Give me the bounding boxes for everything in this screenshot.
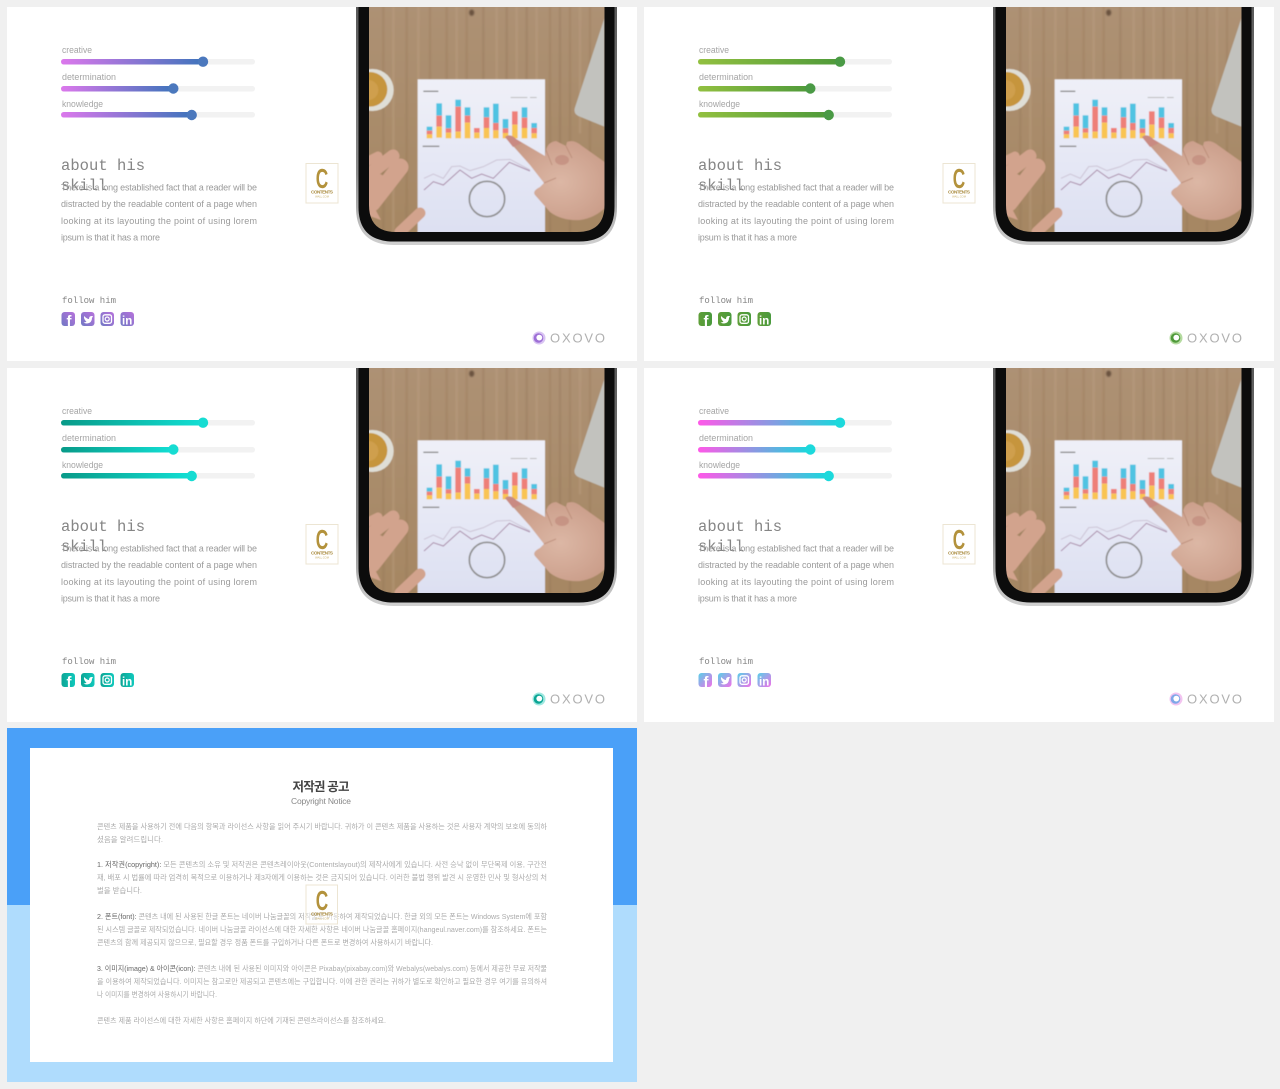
title: copyright notice: 저작권 공고 (292, 779, 350, 794)
social icons: in (759, 316, 769, 328)
phone with photo (989, 363, 1254, 606)
badge: contents: WALL.COM (315, 194, 329, 198)
social icons (698, 312, 771, 330)
body text (61, 182, 257, 242)
section: font: 콘텐츠의 함께 제공되지 않으므로, 필요할 경우 정품 폰트를 구입하거나 다른 폰트로 변경하여 사용하시기 바랍니다. (97, 937, 433, 947)
skill bars (61, 45, 255, 120)
skill bars (698, 406, 892, 481)
badge: contents (306, 163, 338, 203)
body text: There is a long established fact that a reader will be (61, 182, 257, 192)
phone with photo (352, 363, 617, 606)
logo: oxovo: OXOVO (1187, 692, 1242, 706)
section: copyright (97, 859, 547, 895)
badge: contents: C (953, 524, 965, 555)
panel: slide teal (7, 363, 637, 722)
badge: contents: WALL.COM (315, 916, 329, 920)
body text: There is a long established fact that a reader will be (698, 544, 894, 554)
social icons: f (66, 313, 72, 330)
body text: ipsum is that it has a more (698, 594, 797, 604)
body text: There is a long established fact that a reader will be (698, 182, 894, 192)
heading: about his skill: skill (61, 538, 107, 556)
social icons (62, 673, 134, 691)
body text (61, 544, 257, 604)
body text: looking at its layouting the point of using lorem (698, 216, 894, 226)
title: copyright notice (291, 779, 351, 806)
badge: contents (306, 885, 338, 924)
badge: contents: WALL.COM (952, 194, 966, 198)
social icons: in (122, 316, 132, 328)
body text (698, 544, 894, 604)
skill bars: creative (62, 406, 92, 416)
skill bars: knowledge (62, 99, 103, 109)
heading: about his skill: about his (61, 518, 145, 536)
skill bars: creative (699, 45, 729, 55)
badge: contents (943, 524, 975, 564)
body text: ipsum is that it has a more (61, 232, 160, 242)
section: image and icon: 을 이용하여 제작되었습니다. 이미지는 참고로만 제공되고 콘텐츠에는 구입합니다. 이에 관한 권리는 귀하가 별도로 확인하고 필요한 경우 여기를 유의하셔 (97, 976, 547, 986)
badge: contents: WALL.COM (315, 556, 329, 560)
skill bars: knowledge (699, 460, 740, 470)
heading: about his skill (698, 157, 782, 195)
body text: ipsum is that it has a more (61, 594, 160, 604)
body text: distracted by the readable content of a page when (61, 560, 257, 570)
skill bars: determination (699, 72, 753, 82)
panel: copyright notice (7, 728, 637, 1082)
intro text: 셨음을 알려드립니다. (97, 834, 163, 844)
skill bars (698, 45, 892, 120)
heading: about his skill: about his (698, 518, 782, 536)
skill bars: determination (699, 433, 753, 443)
body text (698, 182, 894, 242)
badge: contents: CONTENTS (311, 912, 333, 916)
follow him label: follow him (62, 657, 116, 667)
body text: There is a long established fact that a reader will be (61, 544, 257, 554)
phone with photo (989, 2, 1254, 245)
closing text: 콘텐츠 제품 라이선스에 대한 자세한 사항은 홈페이지 하단에 기재된 콘텐츠라이선스를 참조하세요. (97, 1015, 386, 1025)
phone with photo (352, 2, 617, 245)
section: copyright: 재, 배포 시 법률에 따라 엄격히 목적으로 이용하거나 제3자에게 이용하는 것은 금지되어 있습니다. 이러한 불법 행위 발견 시 운영한 민사 및 형사상의 처 (97, 872, 547, 882)
logo: oxovo: OXOVO (1187, 330, 1242, 346)
section: image and icon (97, 963, 547, 999)
badge: contents: C (316, 163, 328, 194)
heading: about his skill: skill (698, 538, 744, 556)
follow him label: follow him (699, 296, 753, 306)
panel: slide green (644, 2, 1274, 361)
body text: distracted by the readable content of a page when (698, 560, 894, 570)
social icons (62, 312, 134, 330)
badge: contents (943, 163, 975, 203)
badge: contents: WALL.COM (952, 556, 966, 560)
skill bars: determination (62, 433, 116, 443)
social icons: f (704, 674, 710, 691)
section: font: 된 시스템 글꼴로 제작되었습니다. 네이버 나눔글꼴 라이선스에 대한 자세한 사항은 네이버 나눔글꼴 홈페이지(hangeul.naver.com)를 참조하세요. 폰트는 (97, 924, 547, 934)
logo: oxovo: OXOVO (550, 692, 605, 706)
badge: contents (306, 524, 338, 564)
badge: contents: C (316, 524, 328, 555)
badge: contents: CONTENTS (948, 190, 970, 194)
body text: ipsum is that it has a more (698, 232, 797, 242)
social icons: f (704, 313, 710, 330)
skill bars: knowledge (699, 99, 740, 109)
section: copyright: 벌을 받습니다. (97, 885, 142, 895)
skill bars: creative (699, 406, 729, 416)
social icons: f (66, 674, 72, 691)
panel: slide pink (644, 363, 1274, 722)
logo: oxovo: OXOVO (550, 330, 605, 346)
follow him label: follow him (699, 657, 753, 667)
heading: about his skill (698, 518, 782, 556)
section: image and icon: 나 이미지를 변경하여 사용하시기 바랍니다. (97, 989, 217, 999)
heading: about his skill: about his (61, 157, 145, 175)
body text: looking at its layouting the point of using lorem (61, 216, 257, 226)
skill bars (61, 406, 255, 481)
badge: contents: CONTENTS (311, 190, 333, 194)
heading: about his skill (61, 157, 145, 195)
skill bars: knowledge (62, 460, 103, 470)
body text: looking at its layouting the point of using lorem (698, 577, 894, 587)
skill bars: creative (62, 45, 92, 55)
heading: about his skill (61, 518, 145, 556)
section: font (97, 911, 547, 947)
intro text (97, 821, 547, 844)
skill bars: determination (62, 72, 116, 82)
body text: looking at its layouting the point of using lorem (61, 577, 257, 587)
section: font: 2. 폰트(font): 콘텐츠 내에 된 사용된 한글 폰트는 네이버 나눔글꼴의 저작물로 이용하여 제작되었습니다. 한글 외의 모든 폰트는 Windows System에 포함 (97, 911, 547, 921)
panel: slide purple (7, 2, 637, 361)
section: image and icon: 3. 이미지(image) & 아이콘(icon): 콘텐츠 내에 된 사용된 이미지와 아이콘은 Pixabay(pixabay.com)와 Webalys(webalys.com) 등에서 제공한 무료 저작물 (97, 963, 547, 973)
badge: contents: C (316, 885, 328, 916)
title: copyright notice: Copyright Notice (291, 796, 351, 806)
badge: contents: CONTENTS (948, 550, 970, 556)
intro text: 콘텐츠 제품을 사용하기 전에 다음의 항목과 라이선스 사항을 읽어 주시기 바랍니다. 귀하가 이 콘텐츠 제품을 사용하는 것은 사용자 계약의 보호에 동의하 (97, 821, 547, 831)
social icons (698, 673, 771, 691)
badge: contents: C (953, 163, 965, 194)
social icons: in (122, 676, 132, 688)
heading: about his skill: skill (698, 177, 744, 195)
heading: about his skill: skill (61, 177, 107, 195)
social icons: in (759, 676, 769, 688)
body text: distracted by the readable content of a page when (61, 199, 257, 209)
badge: contents: CONTENTS (311, 550, 333, 556)
follow him label: follow him (62, 296, 116, 306)
heading: about his skill: about his (698, 157, 782, 175)
section: copyright: 1. 저작권(copyright): 모든 콘텐츠의 소유 및 저작권은 콘텐츠레이아웃(Contentslayout)의 제작사에게 있습니다. 사전 승낙 없이 무단복제 이용, 구간전 (97, 859, 547, 869)
body text: distracted by the readable content of a page when (698, 199, 894, 209)
